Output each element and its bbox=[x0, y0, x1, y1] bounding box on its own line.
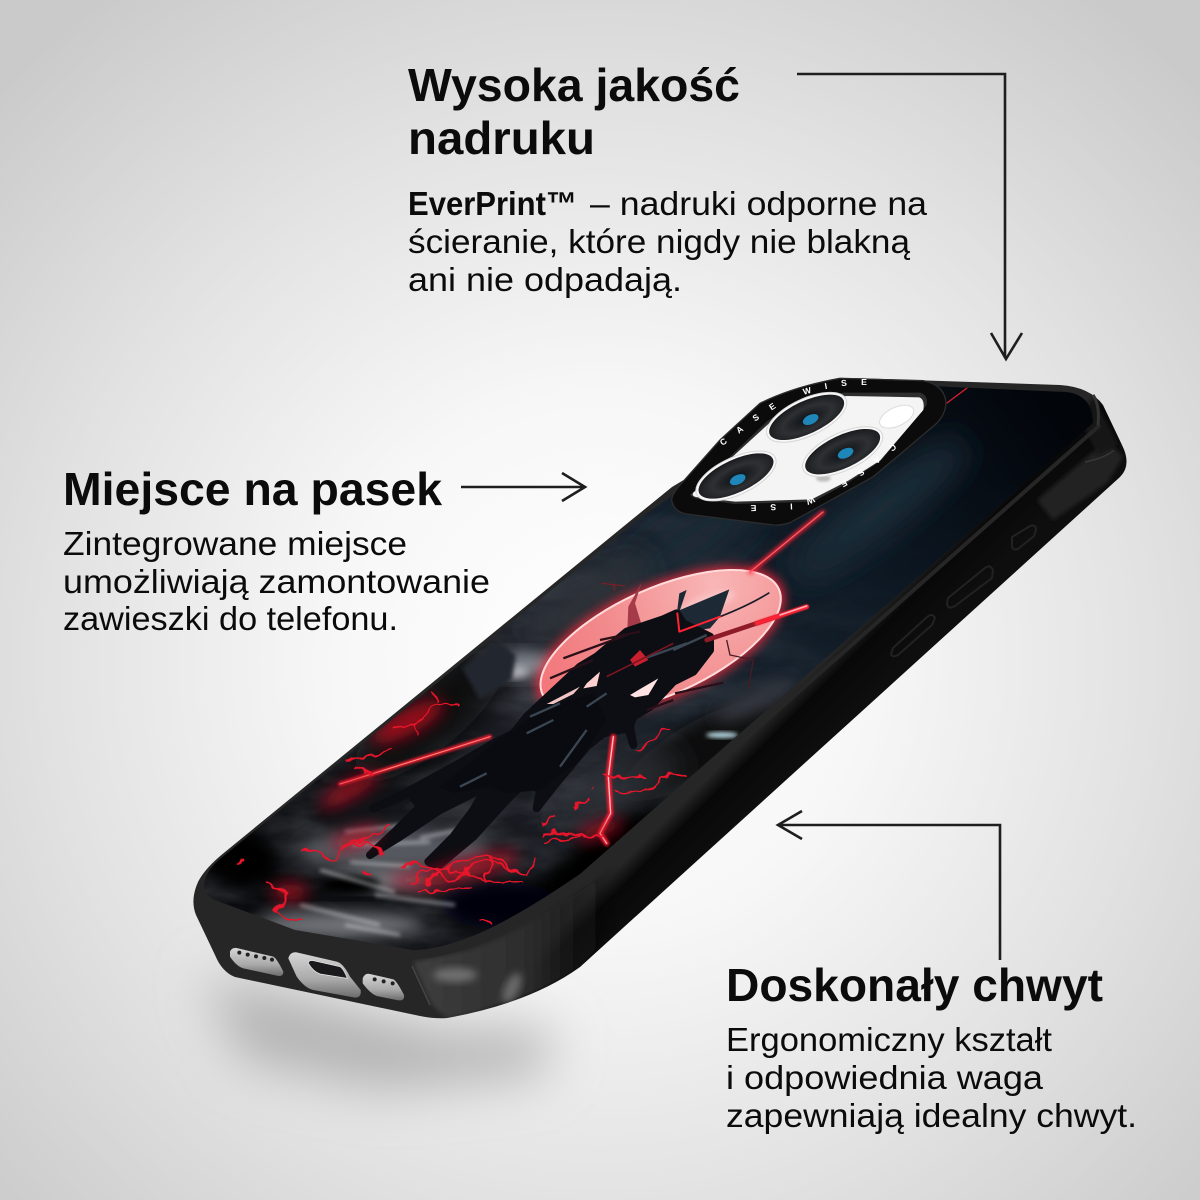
red cracks bbox=[237, 690, 687, 928]
body text: zawieszki do telefonu. bbox=[63, 600, 398, 637]
lens left bbox=[689, 441, 783, 511]
arrow: strap place bbox=[461, 473, 585, 501]
glowing sword and lightning bbox=[340, 606, 807, 843]
red smears bbox=[272, 693, 625, 900]
charging port bbox=[288, 952, 361, 998]
body text: Ergonomiczny kształt bbox=[726, 1021, 1052, 1058]
arrow: grip bbox=[778, 811, 1000, 960]
callout: grip bbox=[726, 959, 1137, 1134]
moon bbox=[528, 558, 793, 718]
laser beam bbox=[750, 388, 967, 572]
right speaker holes bbox=[363, 974, 404, 1000]
body text: ścieranie, które nigdy nie blakną bbox=[408, 223, 911, 260]
clouds bbox=[204, 440, 964, 948]
side buttons bbox=[891, 526, 1036, 656]
heading: Doskonały chwyt bbox=[726, 959, 1103, 1011]
heading bbox=[408, 59, 740, 164]
body text: zapewniają idealny chwyt. bbox=[726, 1097, 1137, 1134]
heading: Wysoka jakość bbox=[408, 59, 740, 111]
lens right bbox=[796, 416, 890, 487]
cape mass bbox=[520, 786, 534, 792]
body text: umożliwiają zamontowanie bbox=[63, 563, 490, 600]
body text bbox=[726, 1021, 1137, 1134]
body text: EverPrint™ bbox=[408, 185, 577, 222]
camera island bbox=[671, 378, 947, 526]
glossy bottom corner bbox=[412, 400, 1123, 1018]
arrow: print quality bbox=[797, 74, 1022, 359]
ripples bbox=[300, 826, 460, 935]
warrior figure bbox=[370, 583, 769, 867]
body text: Zintegrowane miejsce bbox=[63, 525, 407, 562]
glass panel bbox=[693, 396, 924, 502]
phone case illustration bbox=[193, 378, 1127, 1018]
body text bbox=[408, 185, 928, 298]
heading: Miejsce na pasek bbox=[63, 463, 442, 515]
body text: ani nie odpadają. bbox=[408, 261, 682, 298]
brand text: CASE WISE bbox=[720, 379, 867, 445]
back artwork bbox=[204, 386, 1093, 950]
callout: print quality bbox=[408, 59, 928, 298]
island frame bbox=[672, 378, 946, 525]
body text: – nadruki odporne na bbox=[590, 185, 928, 222]
lens top bbox=[760, 382, 854, 453]
left speaker holes bbox=[230, 948, 283, 976]
body text bbox=[63, 525, 490, 637]
armor spikes bbox=[550, 632, 723, 710]
strap slot side highlight bbox=[1038, 448, 1122, 520]
phone drop shadow bbox=[205, 975, 555, 1090]
callout: strap place bbox=[63, 463, 490, 637]
heading: nadruku bbox=[408, 112, 595, 164]
brand text: CASE WISE bbox=[750, 444, 896, 512]
brand text bbox=[720, 379, 896, 512]
case body bbox=[193, 378, 1127, 1018]
case rim bbox=[212, 425, 1100, 957]
body text: i odpowiednia waga bbox=[726, 1059, 1044, 1096]
